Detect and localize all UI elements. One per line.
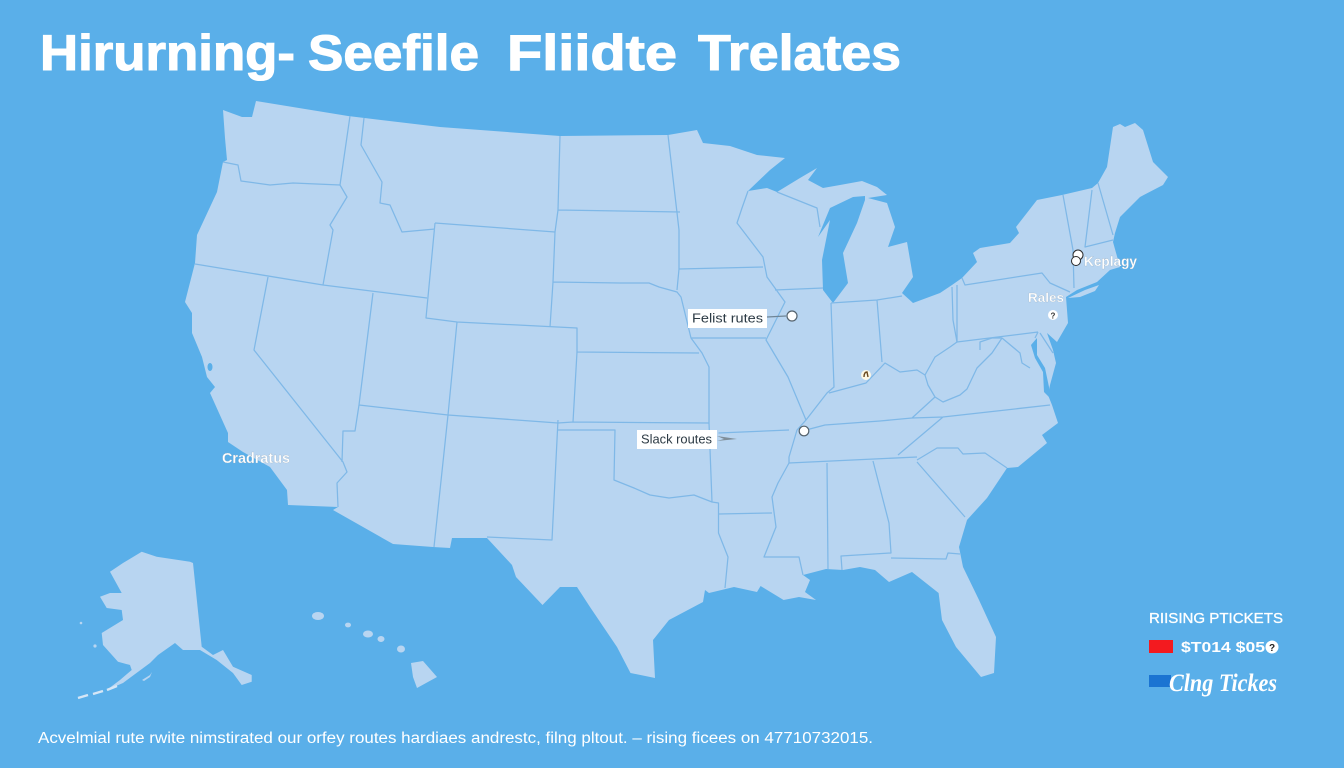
marker: Rales point: ? <box>1051 312 1056 320</box>
legend swatch: blue <box>1149 675 1171 687</box>
marker: New York cluster <box>1072 250 1083 266</box>
title: Hirurning- <box>40 25 295 81</box>
legend swatch: red <box>1149 640 1173 653</box>
map: Hawaii <box>312 612 437 688</box>
title: Fliidte <box>507 25 677 81</box>
title: Seefile <box>308 25 479 81</box>
state borders <box>195 116 1113 588</box>
legend info icon: ? <box>1269 643 1275 654</box>
Long Island <box>1068 285 1099 298</box>
Lake Michigan <box>818 196 865 303</box>
marker: Indiana point <box>861 370 871 380</box>
San Francisco Bay <box>208 363 212 371</box>
callout: Slack routes: Slack routes <box>641 432 712 446</box>
title <box>40 25 901 81</box>
legend value: $T014 $05 <box>1181 639 1265 656</box>
legend script label: Clng Tickes <box>1169 670 1277 697</box>
label: Keplagy: Keplagy <box>1084 254 1137 269</box>
callout: Felist rutes: Felist rutes <box>692 312 763 326</box>
legend <box>1149 610 1283 697</box>
callout: Slack routes <box>637 430 737 449</box>
label: Cradratus: Cradratus <box>222 451 290 467</box>
title: Trelates <box>698 25 901 81</box>
Chesapeake Bay <box>1031 338 1050 398</box>
marker: Rales point <box>1048 310 1058 320</box>
label: Rales: Rales <box>1028 290 1064 305</box>
callout: Felist rutes <box>688 309 797 328</box>
map: Alaska <box>78 552 252 698</box>
land outline <box>185 101 1168 678</box>
marker: Tennessee point <box>799 426 809 436</box>
map: contiguous United States <box>185 101 1168 678</box>
legend heading: RIISING PTICKETS <box>1149 610 1283 627</box>
footer text: Acvelmial rute rwite nimstirated our orfey routes hardiaes andrestc, filng pltout. – rising ficees on 47710732015. <box>38 730 873 747</box>
